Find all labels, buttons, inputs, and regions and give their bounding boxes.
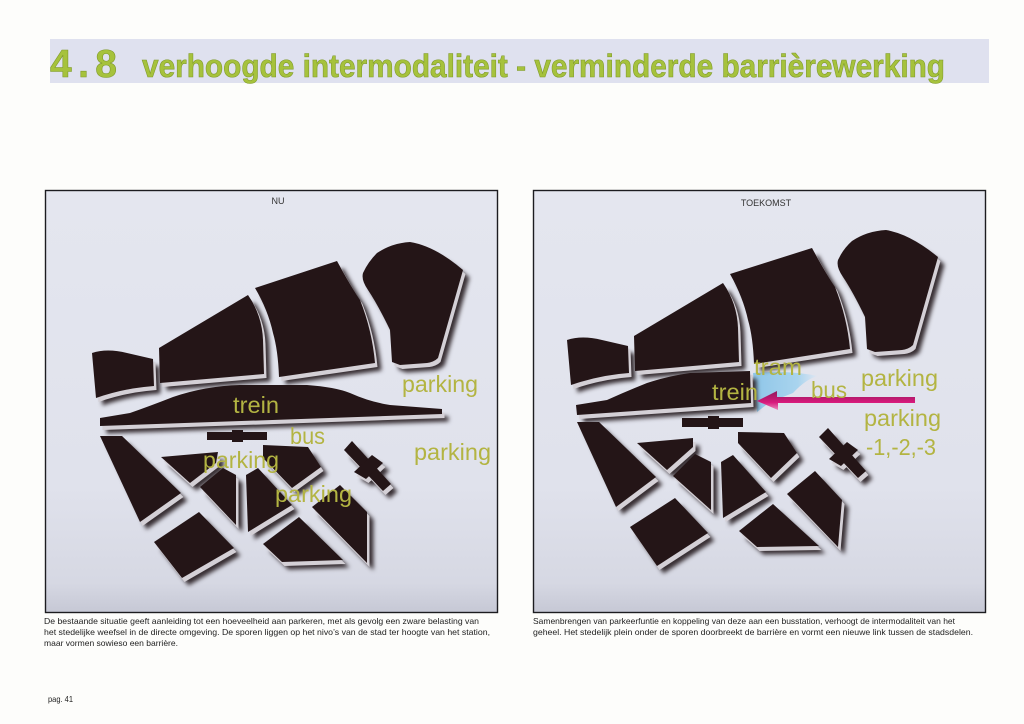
panel: TOEKOMST xyxy=(534,190,986,612)
labels TOEKOMST: bus xyxy=(811,377,847,403)
caption right xyxy=(533,616,973,637)
page number: pag. 41 xyxy=(48,694,73,704)
bus station bar NU xyxy=(207,430,267,442)
caption left xyxy=(44,616,490,648)
caption left: het stedelijke weefsel in de directe omgeving. De sporen liggen op het nivo’s van de stad ter hoogte van het station, xyxy=(44,627,490,637)
labels TOEKOMST: parking xyxy=(864,405,941,431)
labels NU: parking xyxy=(203,447,279,473)
labels TOEKOMST xyxy=(712,354,941,460)
labels TOEKOMST: tram xyxy=(754,354,802,380)
map shapes NU xyxy=(92,242,463,578)
caption right: geheel. Het stedelijk plein onder de sporen doorbreekt de barrière en vormt een nieuwe link tussen de stadsdelen. xyxy=(533,627,973,637)
labels TOEKOMST: -1,-2,-3 xyxy=(866,434,936,460)
labels NU: parking xyxy=(402,371,478,397)
caption right: Samenbrengen van parkeerfuntie en koppeling van deze aan een busstation, verhoogt de intermodaliteit van het xyxy=(533,616,956,626)
blue tram plaza xyxy=(753,372,817,412)
title number: 4 . 8 xyxy=(50,43,117,86)
bus station bar TOEKOMST xyxy=(682,416,743,429)
title text: verhoogde intermodaliteit - verminderde barrièrewerking xyxy=(142,48,945,84)
map shapes TOEKOMST xyxy=(567,230,938,566)
arrow: magenta link xyxy=(757,391,915,410)
labels NU: bus xyxy=(290,423,325,449)
labels NU: trein xyxy=(233,392,279,418)
labels TOEKOMST: trein xyxy=(712,379,758,405)
labels TOEKOMST: parking xyxy=(861,365,938,391)
caption left: De bestaande situatie geeft aanleiding tot een hoeveelheid aan parkeren, met als gevolg een zware belasting van xyxy=(44,616,479,626)
labels NU: parking xyxy=(275,481,352,507)
labels NU xyxy=(203,371,491,507)
labels NU: parking xyxy=(414,439,491,465)
title bar xyxy=(50,39,989,86)
panel heading NU: NU xyxy=(272,196,284,206)
panel heading TOEKOMST: TOEKOMST xyxy=(741,198,792,208)
panel: NU xyxy=(46,190,498,612)
caption left: maar vormen sowieso een barrière. xyxy=(44,638,178,648)
